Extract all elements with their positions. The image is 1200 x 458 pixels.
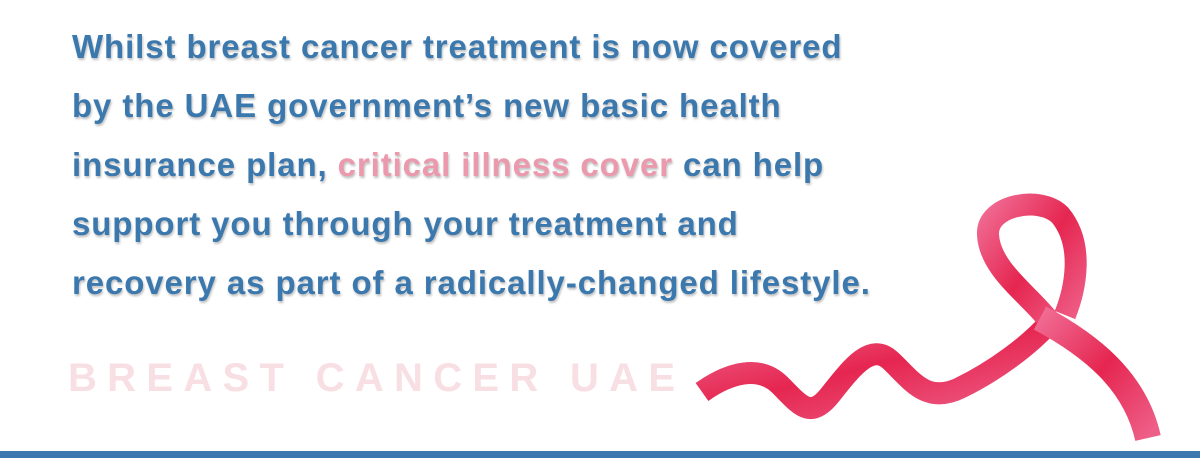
main text block: by the UAE government’s new basic health (72, 87, 782, 124)
main text block: support you through your treatment and (72, 205, 739, 242)
main text block: Whilst breast cancer treatment is now covered (72, 28, 842, 65)
brand label: BREAST CANCER UAE (68, 356, 685, 400)
main text block: insurance plan, critical illness cover can help (72, 146, 824, 183)
main text block (72, 28, 871, 304)
main text block: recovery as part of a radically-changed lifestyle. (72, 264, 871, 301)
bottom bar (0, 451, 1200, 458)
